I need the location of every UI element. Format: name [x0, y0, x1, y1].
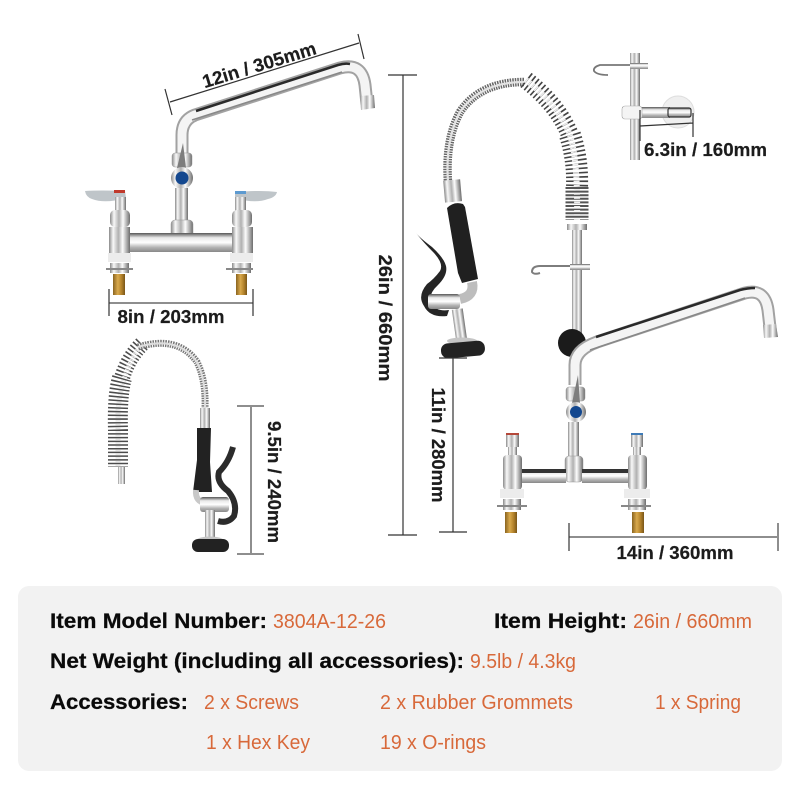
left valve — [85, 190, 133, 295]
accessories: 1 x Hex Key — [206, 732, 310, 754]
accessories — [50, 690, 741, 754]
item height: Item Height: — [494, 609, 627, 633]
specification panel — [18, 586, 782, 771]
item model number: 3804A-12-26 — [273, 611, 386, 633]
wall bracket detail — [594, 53, 694, 160]
spray hose assembly: small detail — [118, 343, 235, 552]
spring — [118, 344, 142, 467]
net weight: 9.5lb / 4.3kg — [470, 651, 576, 673]
faucet: deck mount with 12in spout — [85, 64, 375, 295]
arm — [622, 107, 670, 118]
accessories: 2 x Screws — [204, 692, 299, 714]
dimension: 26in — [375, 75, 417, 535]
body bar — [520, 469, 629, 483]
rod — [630, 53, 640, 110]
accessories: Accessories: — [50, 690, 188, 714]
trigger lever — [416, 233, 449, 316]
dimension: 11in — [428, 358, 467, 532]
item height: 26in / 660mm — [633, 611, 752, 633]
dimension: 11in: 11in / 280mm — [428, 388, 449, 502]
swivel valve with blue knob — [565, 375, 586, 482]
item height — [494, 609, 752, 633]
flexible hose — [448, 82, 524, 182]
dimension: 6.3in — [640, 110, 767, 160]
screw — [668, 108, 691, 117]
clamp block — [622, 106, 642, 119]
dimension: 12in: 12in / 305mm — [200, 37, 319, 92]
hook bracket — [532, 264, 590, 274]
trigger lever — [218, 447, 235, 522]
dimension: 6.3in: 6.3in / 160mm — [644, 139, 767, 160]
item model number — [50, 609, 386, 633]
swivel valve with blue knob — [171, 143, 193, 240]
spray head — [428, 282, 486, 359]
lower tail — [118, 467, 125, 484]
dimension: 8in: 8in / 203mm — [118, 306, 224, 327]
spray head — [192, 490, 229, 552]
net weight: Net Weight (including all accessories): — [50, 649, 464, 673]
panel background — [18, 586, 782, 771]
accessories: 19 x O-rings — [380, 732, 486, 754]
spring coil — [526, 80, 577, 220]
dimension: 9.5in: 9.5in / 240mm — [264, 421, 285, 543]
black handle — [193, 428, 212, 492]
dimension: 14in: 14in / 360mm — [616, 542, 734, 563]
black handle — [447, 203, 478, 283]
rod collar — [567, 224, 587, 230]
lower rod — [630, 118, 640, 160]
connector — [200, 408, 210, 428]
wall flange — [662, 96, 694, 128]
clamp — [630, 63, 648, 69]
accessories: 2 x Rubber Grommets — [380, 692, 573, 714]
right valve — [621, 433, 651, 533]
dimension: 8in — [109, 289, 253, 327]
dimension: 26in: 26in / 660mm — [375, 254, 396, 382]
hook — [594, 65, 630, 75]
main pre-rinse faucet — [416, 80, 778, 533]
dimension: 12in — [165, 34, 364, 115]
dimension: 9.5in — [237, 406, 285, 554]
item model number: Item Model Number: — [50, 609, 267, 633]
swing spout — [575, 288, 778, 385]
riser rod — [572, 228, 582, 340]
body bar — [128, 233, 234, 252]
left valve — [497, 433, 527, 533]
accessories: 1 x Spring — [655, 692, 741, 714]
right valve — [226, 191, 277, 295]
spout tube — [182, 64, 375, 155]
sprayer connector — [443, 179, 462, 203]
wall mount disc — [558, 329, 586, 357]
flexible hose — [138, 343, 205, 408]
